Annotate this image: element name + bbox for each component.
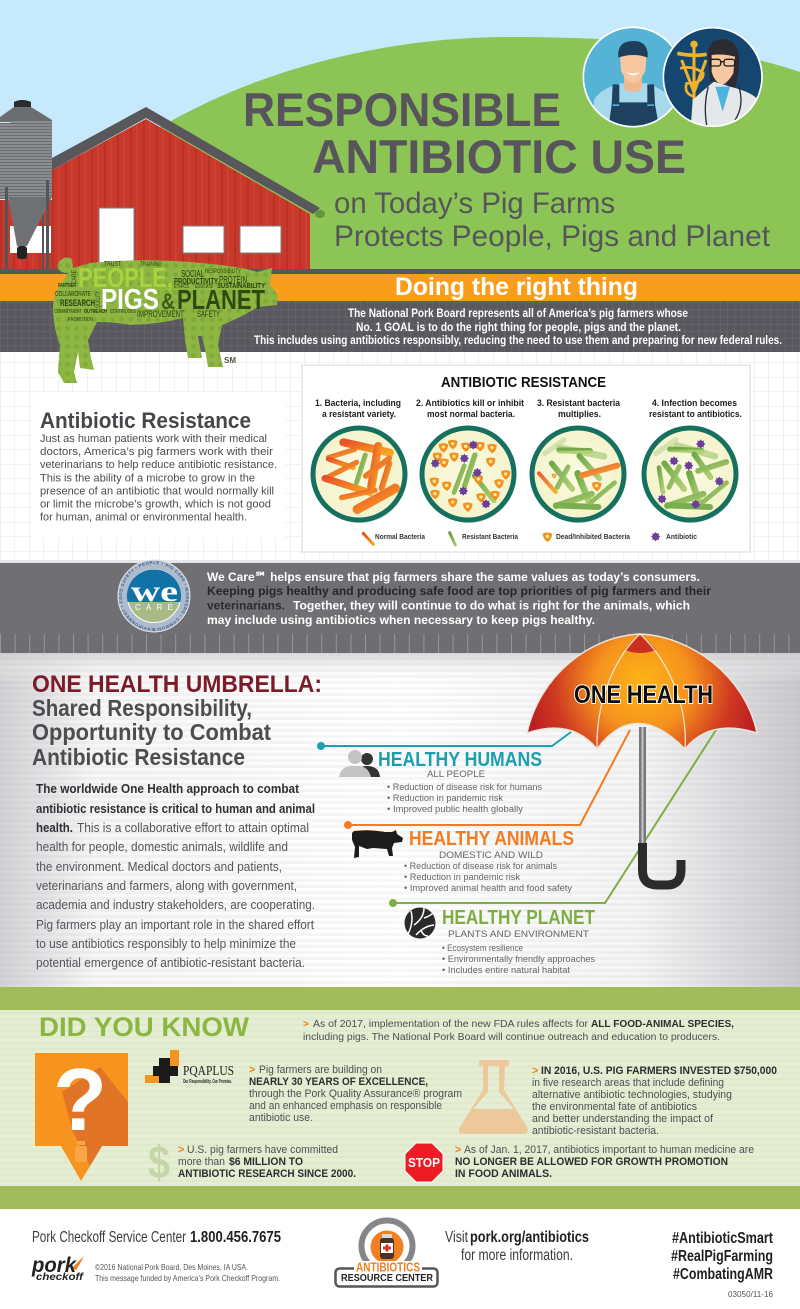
- dish 1: [313, 428, 407, 523]
- text: no longer allowed: IN FOOD ANIMALS.: [455, 1168, 552, 1180]
- text: national pork board: No. 1 GOAL is to do the right thing for people, pigs and the planet.: [356, 322, 681, 334]
- dish 3: [532, 428, 626, 523]
- legend: [363, 532, 697, 545]
- step labels: a resistant variety.: [322, 409, 396, 420]
- text: one health paragraph: health for people, domestic animals, wildlife and: [36, 840, 288, 854]
- step labels: 4. Infection becomes: [652, 398, 737, 409]
- block: healthy humans: [339, 748, 542, 815]
- connector: healthy planet: [389, 730, 716, 907]
- pig word cloud: PROMOTION: [68, 317, 93, 323]
- avatar: veterinarian: [663, 28, 762, 128]
- step labels: 3. Resistant bacteria: [537, 398, 621, 409]
- icon: planet tree: [404, 908, 436, 938]
- icon: pig: [352, 830, 403, 858]
- logo: pork checkoff: pork: [31, 1254, 77, 1277]
- dish 2: [422, 428, 516, 523]
- footer: visit: Visit: [445, 1229, 469, 1246]
- text: investment: the environmental fate of antibiotics: [532, 1101, 698, 1113]
- block: healthy planet: [404, 906, 595, 976]
- diagram title: ANTIBIOTIC RESISTANCE: [441, 374, 606, 391]
- text: no longer allowed: [455, 1144, 754, 1180]
- text: one health paragraph: The worldwide One Health approach to combat: [36, 782, 300, 796]
- we care seal: ENVIRONMENT • FOOD SAFETY • PEOPLE • PIG CARE • WORKERS • COMMUNITY • ANIMAL CARE: [119, 561, 189, 631]
- pig word cloud: ETHICS: [174, 284, 189, 290]
- text: one health paragraph: Pig farmers play an important role in the shared effort: [36, 918, 314, 932]
- body text: for human, animal or environmental health.: [40, 512, 247, 524]
- block: healthy planet: HEALTHY PLANET: [442, 906, 595, 929]
- icon: dollar sign: $: [148, 1136, 170, 1188]
- text: no longer allowed: NO LONGER BE ALLOWED FOR GROWTH PROMOTION: [455, 1156, 728, 1168]
- pig word cloud: OUTREACH: [84, 309, 107, 315]
- logo: antibiotics resource center: RESOURCE CENTER: [341, 1273, 434, 1284]
- text: one health paragraph: potential emergence of antibiotic-resistant bacteria.: [36, 956, 305, 970]
- logo: pqa plus: PQAPLUS: [183, 1064, 234, 1079]
- band: doing the right thing: [0, 269, 800, 352]
- text: investment: alternative antibiotic technologies, studying: [532, 1089, 732, 1101]
- text: pqa: antibiotic use.: [249, 1112, 313, 1124]
- pig word cloud: IMPROVEMENT: [137, 309, 184, 319]
- barn: [52, 107, 325, 270]
- block: healthy animals: • Reduction of disease risk for animals: [404, 861, 557, 872]
- pig word cloud: CARE: [72, 270, 78, 284]
- text: fda rules: As of 2017, implementation of the new FDA rules affects for: [313, 1018, 588, 1030]
- pig word cloud: PARTNER: [58, 283, 76, 289]
- pig word cloud: TRAINING: [140, 261, 162, 268]
- pig word cloud: SUSTAINABILITY: [217, 283, 265, 290]
- we care text: We Care℠ helps ensure that pig farmers share the same values as today’s consumers.: [207, 570, 700, 584]
- block: healthy planet: • Ecosystem resilience: [442, 943, 523, 954]
- dish 4: [644, 428, 738, 523]
- we care seal: we: [131, 575, 178, 608]
- title: RESPONSIBLE: [243, 83, 561, 136]
- pig word cloud: COLLABORATE: [55, 291, 91, 298]
- pig word cloud: [53, 257, 278, 383]
- pig word cloud: COMMITMENT: [54, 309, 82, 315]
- text: investment: and better understanding the impact of: [532, 1113, 714, 1125]
- text: six million: U.S. pig farmers have committed: [187, 1144, 338, 1156]
- footer: visit: pork.org/antibiotics: [470, 1229, 589, 1246]
- connector: healthy animals: [344, 730, 630, 829]
- connector: healthy humans: [317, 732, 571, 750]
- text: one health paragraph: veterinarians and farmers, along with government,: [36, 879, 297, 893]
- body text: This is the ability of a microbe to grow in the: [40, 472, 255, 484]
- text: fda rules: [303, 1018, 734, 1043]
- pig word cloud: PROTEIN: [219, 275, 247, 286]
- pig word cloud: TRUST: [104, 259, 121, 268]
- block: healthy animals: [352, 827, 574, 894]
- we care text: Keeping pigs healthy and producing safe food are top priorities of pig farmers and their: [207, 584, 711, 598]
- heading: one health umbrella: [32, 671, 322, 770]
- icon: question callout: [35, 1050, 128, 1181]
- logo: pqa plus: Our Responsibility. Our Promise.: [183, 1079, 232, 1085]
- text: national pork board: The National Pork Board represents all of America’s pig farmers whose: [348, 308, 688, 320]
- text: no longer allowed: As of Jan. 1, 2017, antibiotics important to human medicine are: [464, 1144, 754, 1156]
- text: investment: >: [532, 1065, 538, 1077]
- text: pqa: NEARLY 30 YEARS OF EXCELLENCE,: [249, 1076, 428, 1088]
- text: six million: [178, 1144, 356, 1180]
- heading: one health umbrella: Opportunity to Combat: [32, 719, 271, 745]
- icon: stop sign: STOP: [408, 1156, 440, 1170]
- logo: antibiotics resource center: [336, 1220, 438, 1286]
- legend: Normal Bacteria: [375, 534, 425, 541]
- body text: [40, 433, 277, 524]
- footer: copyright: ©2016 National Pork Board, Des Moines, IA USA.: [95, 1262, 248, 1272]
- pig word cloud: &: [161, 289, 175, 314]
- body text: veterinarians to help reduce antibiotic resistance.: [40, 459, 277, 471]
- block: healthy planet: • Environmentally friendly approaches: [442, 954, 595, 965]
- avatars: farmer and veterinarian: [583, 27, 762, 128]
- grid background: [0, 352, 800, 563]
- text: national pork board: [254, 308, 782, 347]
- text: fda rules: including pigs. The National Pork Board will continue outreach and education to producers.: [303, 1031, 720, 1043]
- step labels: resistant to antibiotics.: [649, 409, 742, 420]
- heading: one health umbrella: Shared Responsibility,: [32, 695, 252, 721]
- barn window left: [183, 226, 224, 253]
- body text: or limit the microbe’s growth, which is not good: [40, 498, 271, 510]
- body text: presence of an antibiotic that would normally kill: [40, 486, 274, 498]
- logo: pqa plus: [145, 1050, 234, 1085]
- footer: copyright: [95, 1262, 280, 1283]
- body text: doctors, America’s pig farmers work with their: [40, 446, 273, 458]
- footer: copyright: This message funded by America’s Pork Checkoff Program.: [95, 1273, 280, 1283]
- umbrella shaft: [639, 727, 646, 845]
- logo: pork checkoff: [31, 1254, 85, 1283]
- umbrella handle: [642, 843, 681, 885]
- text: one health paragraph: academia and industry stakeholders, are cooperating.: [36, 898, 315, 912]
- band: we care: [0, 560, 800, 653]
- text: fda rules: >: [303, 1019, 309, 1030]
- title: [243, 83, 686, 183]
- panel: did you know background: [0, 987, 800, 1309]
- text: pqa: >: [249, 1064, 255, 1076]
- title: ANTIBIOTIC USE: [312, 130, 686, 183]
- text: one health paragraph: the environment. Medical doctors and patients,: [36, 860, 282, 874]
- pig word cloud: SAFETY: [197, 309, 220, 319]
- step labels: [315, 398, 742, 420]
- block: healthy animals: DOMESTIC AND WILD: [439, 850, 543, 861]
- heading: one health umbrella: Antibiotic Resistance: [32, 744, 245, 770]
- we care text: [207, 570, 711, 627]
- pig word cloud: QUALITY: [96, 291, 102, 308]
- footer: hashtags: #AntibioticSmart: [672, 1230, 773, 1247]
- step labels: multiplies.: [558, 409, 601, 420]
- footer: hashtags: #CombatingAMR: [673, 1266, 773, 1283]
- pig word cloud: PIGS: [101, 284, 159, 316]
- footer: visit: [445, 1229, 589, 1264]
- legend: Antibiotic: [666, 534, 697, 541]
- step labels: most normal bacteria.: [427, 409, 515, 420]
- subtitle: Protects People, Pigs and Planet: [334, 220, 771, 253]
- logo: antibiotics resource center: ANTIBIOTICS: [356, 1260, 420, 1274]
- block: healthy animals: • Improved animal health and food safety: [404, 883, 572, 894]
- we care seal: [118, 560, 191, 633]
- heading: doing the right thing: Doing the right thing: [395, 273, 638, 301]
- footer: hashtags: #RealPigFarming: [671, 1248, 773, 1265]
- block: healthy animals: • Reduction in pandemic risk: [404, 872, 520, 883]
- subtitle: on Today’s Pig Farms: [334, 187, 615, 220]
- step labels: 2. Antibiotics kill or inhibit: [416, 398, 525, 409]
- we care text: may include using antibiotics when necessary to keep pigs healthy.: [207, 613, 595, 627]
- pig word cloud: SOCIAL: [181, 269, 204, 280]
- panel: antibiotic resistance text: [32, 393, 285, 538]
- text: six million: $6 MILLION TO: [229, 1156, 303, 1168]
- icon: people: [339, 750, 380, 777]
- petri dishes: [313, 428, 738, 523]
- block: healthy humans: • Improved public health globally: [387, 804, 523, 815]
- legend: Resistant Bacteria: [462, 534, 518, 541]
- we care text: veterinarians.: [207, 598, 285, 612]
- footer: code: 03050/11-16: [728, 1289, 773, 1299]
- legend: Dead/Inhibited Bacteria: [556, 534, 630, 541]
- pig word cloud: CONTINUOUS: [110, 309, 136, 315]
- avatar: farmer: [583, 27, 683, 128]
- block: healthy humans: HEALTHY HUMANS: [378, 748, 542, 771]
- pig word cloud: PEOPLE,: [78, 262, 173, 293]
- text: one health paragraph: antibiotic resistance is critical to human and animal: [36, 802, 315, 816]
- heading: Antibiotic Resistance: [40, 408, 251, 433]
- block: healthy animals: HEALTHY ANIMALS: [409, 827, 574, 850]
- pig word cloud: RESPONSIBILITY: [205, 268, 241, 275]
- text: investment: [532, 1065, 777, 1137]
- block: healthy planet: PLANTS AND ENVIRONMENT: [448, 929, 589, 940]
- pig word cloud: PRODUCTIVITY: [174, 276, 218, 286]
- icon: flask: [459, 1060, 528, 1134]
- pig word cloud: PLANET: [177, 284, 265, 315]
- block: healthy humans: • Reduction of disease risk for humans: [387, 782, 542, 793]
- text: pqa: Pig farmers are building on: [259, 1064, 382, 1076]
- service mark: SM: [224, 356, 236, 365]
- footer: service center: Pork Checkoff Service Center: [32, 1229, 186, 1246]
- text: fda rules: ALL FOOD-ANIMAL SPECIES,: [591, 1018, 734, 1030]
- block: healthy humans: • Reduction in pandemic risk: [387, 793, 503, 804]
- step labels: 1. Bacteria, including: [315, 398, 401, 409]
- barn door: [99, 208, 134, 270]
- we care text: Together, they will continue to do what is right for the animals, which: [293, 598, 690, 612]
- text: investment: in five research areas that include defining: [532, 1077, 724, 1089]
- text: investment: IN 2016, U.S. PIG FARMERS INVESTED $750,000: [541, 1065, 777, 1077]
- text: one health paragraph: health.: [36, 821, 73, 835]
- logo: pork checkoff: checkoff: [36, 1271, 85, 1283]
- panel: one health background: [0, 653, 800, 988]
- text: one health paragraph: This is a collaborative effort to attain optimal: [77, 821, 309, 835]
- panel: antibiotic resistance diagram: [302, 365, 750, 552]
- sky background: [0, 0, 800, 272]
- heading: one health umbrella: ONE HEALTH UMBRELLA:: [32, 671, 322, 698]
- block: healthy planet: • Includes entire natural habitat: [442, 965, 570, 976]
- green hill: [110, 37, 800, 272]
- barn window right: [240, 226, 281, 253]
- footer: visit: for more information.: [461, 1247, 573, 1264]
- text: one health paragraph: [36, 782, 315, 970]
- text: investment: antibiotic-resistant bacteria.: [532, 1125, 659, 1137]
- subtitle: [334, 187, 771, 253]
- text: six million: ANTIBIOTIC RESEARCH SINCE 2000.: [178, 1168, 356, 1180]
- footer: service center: 1.800.456.7675: [190, 1229, 281, 1246]
- body text: Just as human patients work with their medical: [40, 433, 267, 445]
- pig silhouette: [53, 257, 278, 383]
- umbrella canopy: [527, 634, 757, 749]
- text: no longer allowed: >: [455, 1144, 461, 1156]
- heading: did you know: DID YOU KNOW: [39, 1012, 250, 1042]
- umbrella: [527, 634, 757, 885]
- icon: stop sign: [405, 1143, 443, 1182]
- icon: grain silo: [0, 100, 60, 281]
- text: pqa: [249, 1064, 462, 1124]
- we care seal: CARE: [135, 603, 173, 612]
- umbrella label: ONE HEALTH: [574, 681, 713, 709]
- text: pqa: and an enhanced emphasis on responsible: [249, 1100, 442, 1112]
- footer: hashtags: [671, 1230, 773, 1283]
- pig word cloud: EDUCATE: [195, 284, 214, 290]
- block: healthy humans: ALL PEOPLE: [427, 769, 485, 780]
- text: one health paragraph: to use antibiotics responsibly to help minimize the: [36, 937, 296, 951]
- text: six million: >: [178, 1144, 184, 1156]
- icon: question callout: ?: [53, 1050, 107, 1149]
- pig word cloud: RESEARCH: [60, 298, 95, 308]
- text: six million: more than: [178, 1156, 225, 1168]
- text: pqa: through the Pork Quality Assurance® program: [249, 1088, 462, 1100]
